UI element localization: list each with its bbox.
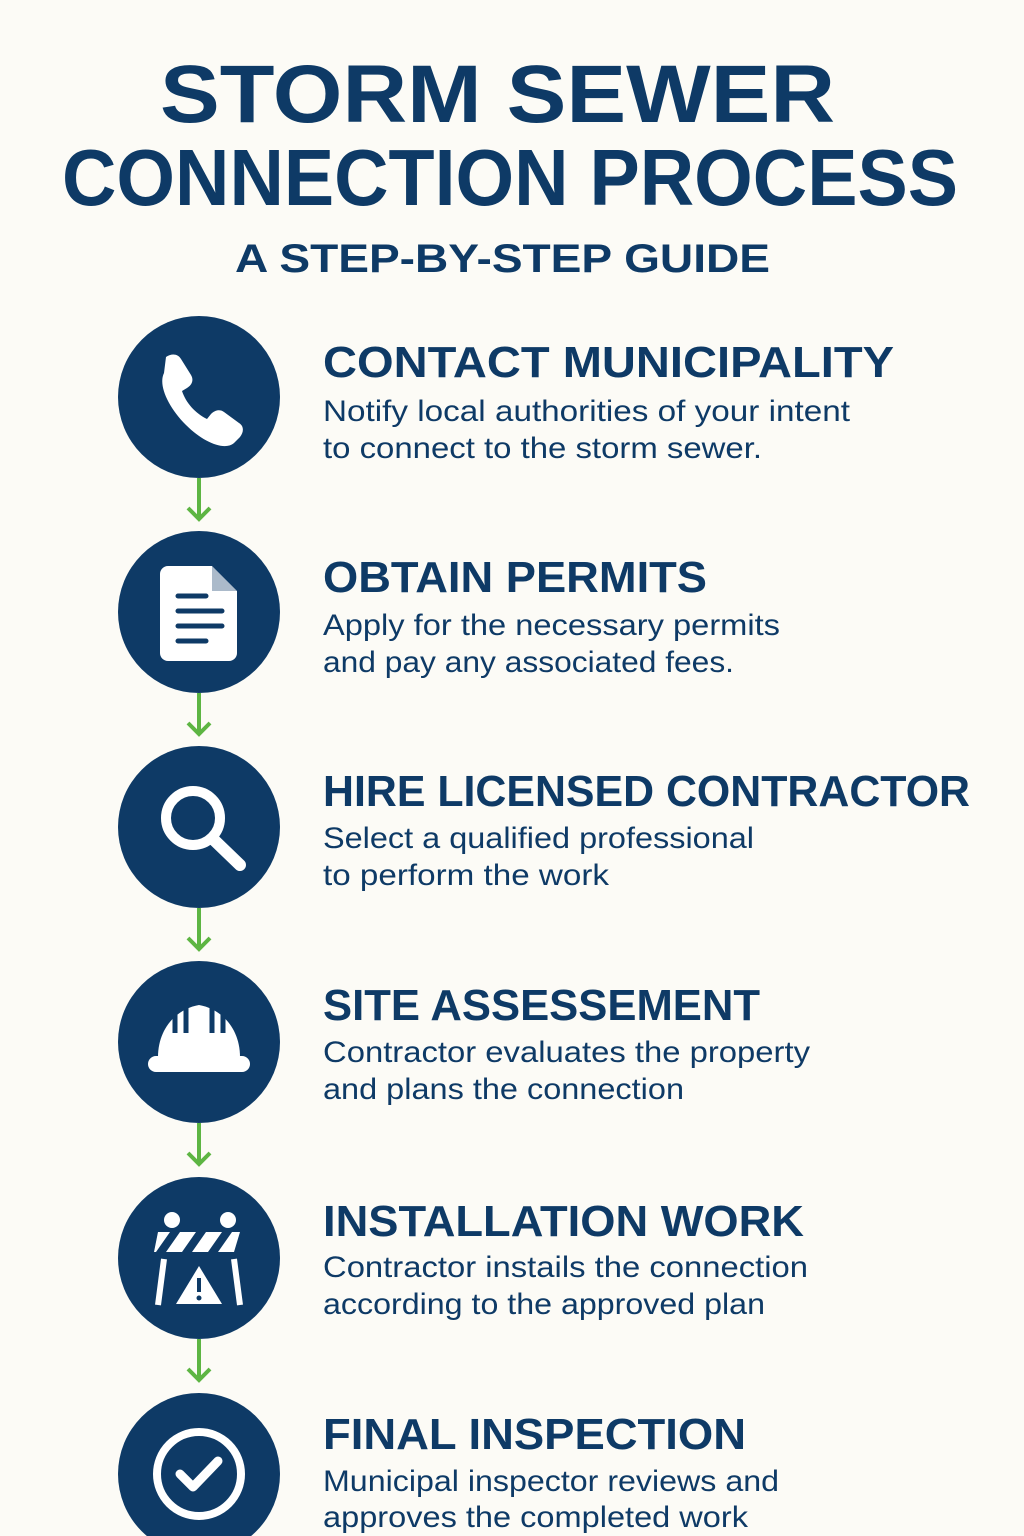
- heading: HIRE LICENSED CONTRACTOR: [323, 767, 970, 816]
- description: to connect to the storm sewer.: [323, 432, 762, 465]
- icon: phone: [118, 316, 280, 478]
- description: [323, 395, 851, 465]
- description: Contractor evaluates the property: [323, 1036, 810, 1069]
- step 5: installation work: [118, 1177, 808, 1339]
- step 1: contact municipality: [118, 316, 894, 478]
- step 3: hire licensed contractor: [118, 746, 970, 908]
- title: CONNECTION PROCESS: [62, 133, 958, 222]
- step 6: final inspection: [118, 1393, 779, 1536]
- heading: INSTALLATION WORK: [323, 1197, 804, 1246]
- description: [323, 1251, 808, 1321]
- description: approves the completed work: [323, 1501, 749, 1534]
- arrows: [188, 478, 210, 1380]
- title: STORM SEWER: [160, 49, 835, 140]
- description: Select a qualified professional: [323, 822, 754, 855]
- step 2: obtain permits: [118, 531, 780, 693]
- description: Municipal inspector reviews and: [323, 1465, 779, 1498]
- icon: hard hat: [118, 961, 280, 1123]
- icon: barricade: [118, 1177, 280, 1339]
- description: Notify local authorities of your intent: [323, 395, 851, 428]
- subtitle: A STEP-BY-STEP GUIDE: [235, 237, 770, 281]
- description: according to the approved plan: [323, 1288, 765, 1321]
- description: Apply for the necessary permits: [323, 609, 780, 642]
- description: [323, 1036, 810, 1106]
- description: [323, 609, 780, 679]
- heading: OBTAIN PERMITS: [323, 553, 707, 602]
- description: Contractor instails the connection: [323, 1251, 808, 1284]
- heading: SITE ASSESSEMENT: [323, 981, 760, 1030]
- icon: check: [118, 1393, 280, 1536]
- description: and pay any associated fees.: [323, 646, 734, 679]
- description: to perform the work: [323, 859, 610, 892]
- step 4: site assessment: [118, 961, 810, 1123]
- heading: FINAL INSPECTION: [323, 1410, 746, 1459]
- description: [323, 1465, 779, 1534]
- description: and plans the connection: [323, 1073, 684, 1106]
- icon: document: [118, 531, 280, 693]
- icon: magnifier: [118, 746, 280, 908]
- description: [323, 822, 754, 892]
- title: [62, 49, 958, 222]
- heading: CONTACT MUNICIPALITY: [323, 338, 894, 387]
